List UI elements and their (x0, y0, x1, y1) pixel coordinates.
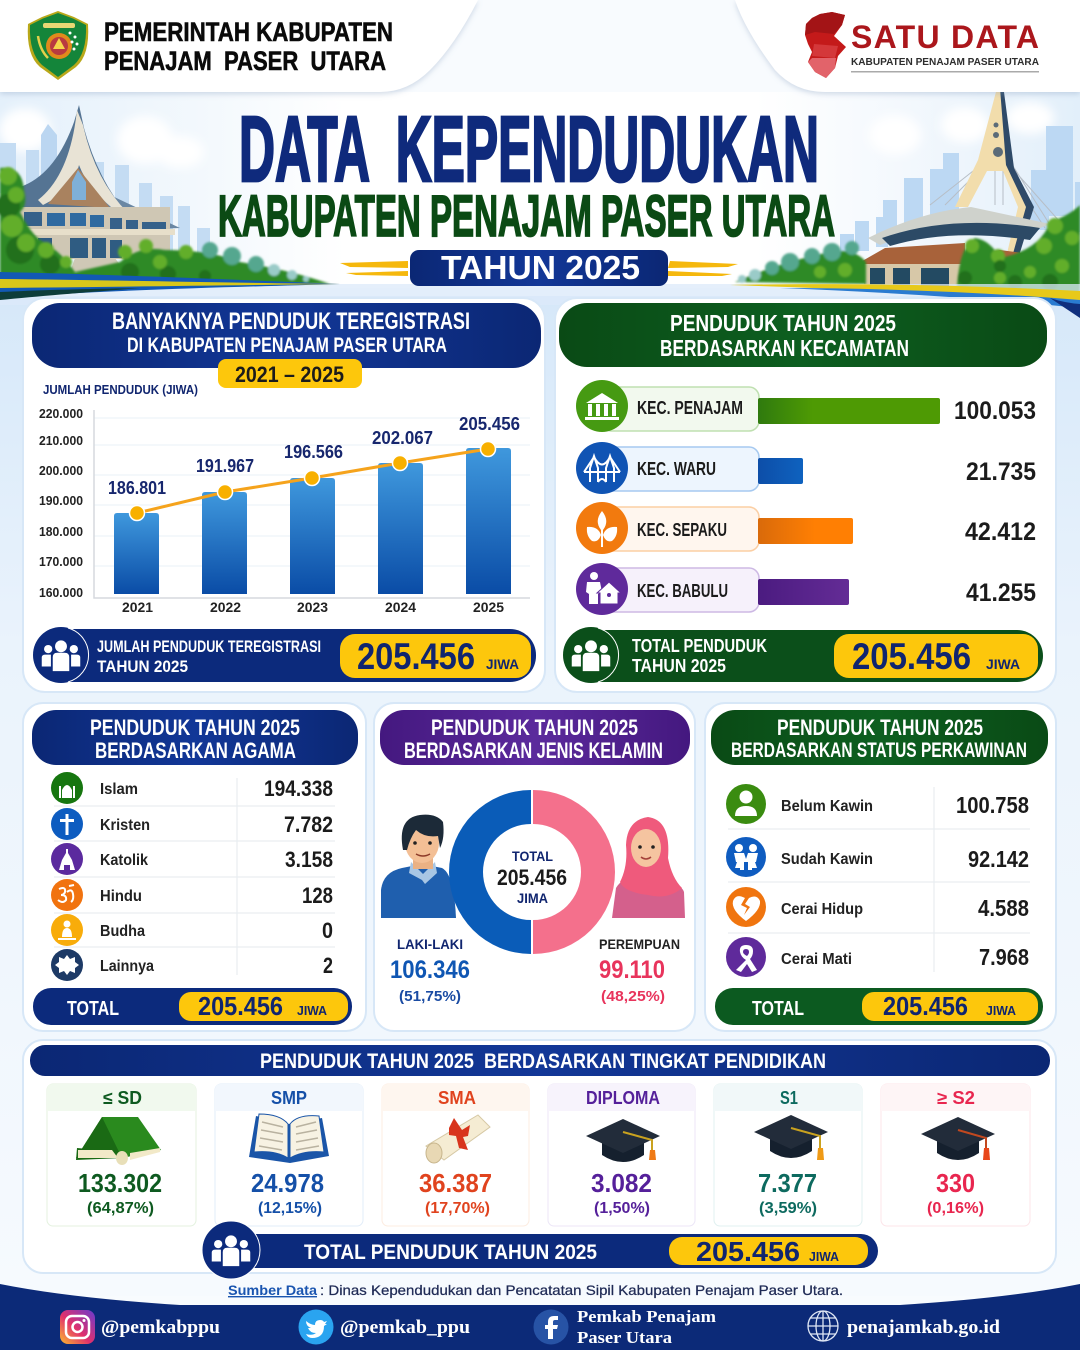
social: twitter (298, 1310, 470, 1344)
total registered bar: TAHUN 2025 (97, 657, 188, 676)
panel: registered population chart (23, 298, 545, 692)
male figure: LAKI-LAKI (397, 936, 463, 952)
panel: population by marital status (705, 703, 1056, 1031)
row: Hindu: Hindu (100, 888, 142, 905)
year badge: TAHUN 2025 (441, 249, 640, 286)
total marital bar (715, 988, 1043, 1025)
heading (559, 303, 1047, 367)
row: Waru: 21.735 (966, 458, 1036, 486)
card: S1: (3,59%) (759, 1200, 817, 1217)
footer band (0, 1284, 1080, 1350)
total registered bar (33, 627, 536, 683)
total district bar: 205.456 (852, 636, 971, 677)
panel: population by religion (23, 703, 366, 1031)
bar chart: 170.000 (39, 554, 83, 569)
heading: BERDASARKAN KECAMATAN (660, 335, 909, 361)
row: Cerai Hidup (726, 887, 1029, 927)
heading (30, 1045, 1050, 1076)
water (0, 272, 1080, 318)
social: facebook: Pemkab Penajam (577, 1307, 716, 1326)
icon: people (42, 640, 80, 671)
row: Sudah Kawin (726, 837, 1029, 877)
row: Penajam: 100.053 (954, 397, 1036, 425)
clouds (0, 102, 1054, 168)
heading: BANYAKNYA PENDUDUK TEREGISTRASI (112, 308, 470, 335)
card: SMA (382, 1084, 529, 1226)
row: Budha: 0 (322, 918, 333, 943)
total registered bar: 205.456 (357, 636, 475, 677)
bar chart: 160.000 (39, 585, 83, 600)
row: Lainnya: Lainnya (100, 958, 154, 975)
body background (0, 296, 1080, 1296)
total education bar (202, 1221, 878, 1279)
title (218, 97, 835, 249)
donut chart: TOTAL (512, 848, 553, 864)
row: Lainnya: 2 (323, 953, 333, 978)
bar chart: 196.566 (284, 442, 343, 462)
right bridge pylon and cables (868, 88, 1060, 272)
icon: people (572, 640, 610, 671)
total registered bar: JIWA (486, 656, 519, 672)
heading: PENDUDUK TAHUN 2025 (777, 715, 983, 740)
right trees (735, 205, 1080, 300)
icon: man (381, 815, 456, 918)
row: Belum Kawin: 100.758 (956, 792, 1029, 818)
social: facebook: Paser Utara (577, 1328, 673, 1347)
total religion bar (33, 988, 352, 1025)
right building (857, 243, 1030, 286)
header panel left (0, 0, 478, 92)
bar chart: 2022 (210, 599, 241, 615)
source note: : Dinas Kependudukan dan Pencatatan Sipil Kabupaten Penajam Paser Utara. (320, 1282, 843, 1298)
header panel right (735, 0, 1080, 92)
row: Belum Kawin (726, 784, 1029, 824)
header text: PENAJAM PASER UTARA (104, 46, 386, 76)
row: Belum Kawin: Belum Kawin (781, 798, 873, 815)
row: Budha (51, 914, 333, 946)
row: Babulu (576, 563, 1036, 615)
row: Sepaku (576, 502, 1036, 554)
card: SMA: (17,70%) (425, 1200, 490, 1217)
social: facebook (534, 1307, 716, 1347)
satu data wordmark: SATU DATA (851, 19, 1039, 55)
row: Sudah Kawin: 92.142 (968, 846, 1029, 872)
row: Sepaku: KEC. SEPAKU (637, 520, 727, 540)
total marital bar: TOTAL (752, 998, 804, 1020)
axis title: JUMLAH PENDUDUK (JIWA) (43, 382, 198, 397)
heading: PENDUDUK TAHUN 2025 (670, 310, 896, 336)
row: Babulu: 41.255 (966, 579, 1036, 607)
row: Kristen: Kristen (100, 817, 150, 834)
row: Budha: Budha (100, 923, 145, 940)
row: Islam: Islam (100, 781, 138, 798)
bar chart: 2023 (297, 599, 328, 615)
female figure: PEREMPUAN (599, 936, 680, 952)
card: S1: S1 (780, 1088, 798, 1108)
header text: PEMERINTAH KABUPATEN (104, 17, 393, 47)
social: twitter: @pemkab_ppu (340, 1317, 470, 1338)
total registered bar: JUMLAH PENDUDUK TEREGISTRASI (97, 637, 321, 656)
donut chart (449, 790, 615, 954)
bar chart: 190.000 (39, 493, 83, 508)
male figure (390, 936, 470, 1005)
total religion bar: JIWA (297, 1003, 328, 1018)
icon: people (212, 1235, 250, 1266)
heading: BERDASARKAN JENIS KELAMIN (404, 738, 663, 763)
row: Hindu: 128 (302, 883, 333, 908)
bar chart (39, 406, 530, 615)
icon: open book (249, 1114, 329, 1163)
left building (15, 105, 180, 272)
satu data wordmark: KABUPATEN PENAJAM PASER UTARA (851, 57, 1039, 68)
icon: regency shield logo (28, 11, 88, 80)
row: Hindu (51, 879, 333, 911)
card: SD: ≤ SD (103, 1088, 142, 1108)
year range badge: 2021 – 2025 (235, 362, 344, 387)
card: Diploma: (1,50%) (594, 1200, 650, 1217)
icon: graduation cap (754, 1115, 828, 1160)
row: Islam: 194.338 (264, 776, 333, 801)
bar chart: 200.000 (39, 463, 83, 478)
total education bar: JIWA (809, 1249, 840, 1264)
donut chart: 205.456 (497, 865, 567, 890)
row: Islam (51, 772, 333, 804)
heading: PENDUDUK TAHUN 2025 BERDASARKAN TINGKAT PENDIDIKAN (260, 1050, 826, 1073)
donut chart: JIMA (517, 890, 548, 906)
card: S1: 7.377 (758, 1168, 817, 1198)
card: SD (47, 1084, 196, 1226)
card: S2 (881, 1084, 1030, 1226)
row: Kristen (51, 808, 333, 840)
bar chart: 210.000 (39, 433, 83, 448)
panel: population by gender (374, 703, 695, 1031)
total education bar: 205.456 (696, 1236, 800, 1267)
row: Katolik: 3.158 (285, 847, 333, 872)
sky (0, 92, 1080, 288)
social: website: penajamkab.go.id (847, 1317, 1000, 1338)
social: website (808, 1311, 1000, 1341)
female figure: (48,25%) (601, 988, 665, 1005)
row: Sudah Kawin: Sudah Kawin (781, 851, 873, 868)
row: Kristen: 7.782 (284, 812, 333, 837)
card: S2: ≥ S2 (937, 1088, 975, 1108)
total marital bar: JIWA (986, 1003, 1017, 1018)
row: Sepaku: 42.412 (965, 518, 1036, 546)
card: S2: (0,16%) (927, 1200, 984, 1217)
bar chart: 2025 (473, 599, 504, 615)
row: Penajam: KEC. PENAJAM (637, 398, 743, 418)
bar chart: 180.000 (39, 524, 83, 539)
year badge (340, 249, 738, 286)
bar chart: 191.967 (196, 456, 254, 476)
icon: regency map (805, 12, 846, 78)
panel: population by district (555, 298, 1056, 692)
male figure: (51,75%) (399, 988, 461, 1005)
banner scenery (0, 88, 1080, 318)
panel: population by education (23, 1040, 1056, 1279)
heading (32, 303, 541, 368)
total district bar (563, 627, 1043, 683)
source note: Sumber Data (228, 1282, 317, 1298)
bar chart: 205.456 (459, 414, 520, 434)
card: SMP (215, 1084, 363, 1226)
female figure (599, 936, 680, 1005)
total district bar: TAHUN 2025 (632, 656, 726, 676)
bar chart: 2021 (122, 599, 153, 615)
male figure: 106.346 (390, 956, 470, 984)
row: Cerai Mati: Cerai Mati (781, 951, 852, 968)
heading: PENDUDUK TAHUN 2025 (90, 715, 300, 740)
skyline right (840, 126, 1080, 254)
row: Waru (576, 442, 1036, 494)
total district bar: JIWA (986, 656, 1020, 672)
card: SMP: 24.978 (251, 1168, 324, 1198)
row: Cerai Hidup: 4.588 (978, 895, 1029, 921)
heading (711, 710, 1048, 765)
card: SMP: SMP (271, 1088, 307, 1108)
total marital bar: 205.456 (883, 991, 968, 1021)
card: SD: 133.302 (78, 1168, 162, 1198)
row: Katolik: Katolik (100, 852, 148, 869)
row: Cerai Mati: 7.968 (979, 944, 1029, 970)
icon: graduation cap (586, 1119, 660, 1162)
row: Cerai Hidup: Cerai Hidup (781, 901, 863, 918)
header text (104, 17, 393, 76)
bar chart: 186.801 (108, 478, 166, 498)
skyline left (0, 124, 210, 258)
heading: DI KABUPATEN PENAJAM PASER UTARA (127, 334, 447, 357)
card: S2: 330 (936, 1168, 975, 1198)
heading (32, 710, 358, 765)
heading (380, 710, 690, 765)
heading: BERDASARKAN AGAMA (95, 738, 296, 763)
row: Babulu: KEC. BABULU (637, 581, 728, 601)
card: Diploma: 3.082 (591, 1168, 652, 1198)
icon: diploma scroll (426, 1115, 490, 1163)
row: Waru: KEC. WARU (637, 459, 716, 479)
card: SMA: SMA (438, 1088, 476, 1108)
total religion bar: TOTAL (67, 998, 119, 1020)
icon: graduation cap (921, 1117, 995, 1160)
total district bar: TOTAL PENDUDUK (632, 636, 767, 656)
row: Lainnya (51, 949, 333, 981)
social: instagram: @pemkabppu (101, 1317, 220, 1338)
total religion bar: 205.456 (198, 991, 283, 1021)
card: Diploma (548, 1084, 695, 1226)
row: Penajam (576, 380, 1036, 432)
bar chart: 202.067 (372, 428, 433, 448)
card: SD: (64,87%) (87, 1200, 154, 1217)
female figure: 99.110 (599, 956, 665, 984)
icon: green books (76, 1117, 161, 1165)
card: SMA: 36.387 (419, 1168, 492, 1198)
heading: PENDUDUK TAHUN 2025 (431, 715, 638, 740)
left trees (0, 167, 330, 284)
row: Katolik (51, 843, 333, 875)
total education bar: TOTAL PENDUDUK TAHUN 2025 (304, 1241, 597, 1264)
icon: woman (612, 817, 685, 918)
card: S1 (714, 1084, 862, 1226)
card: SMP: (12,15%) (258, 1200, 322, 1217)
bar chart: 2024 (385, 599, 416, 615)
card: Diploma: DIPLOMA (586, 1088, 660, 1108)
social: instagram (60, 1310, 220, 1344)
bar chart: 220.000 (39, 406, 83, 421)
satu data wordmark (851, 19, 1039, 72)
row: Cerai Mati (726, 937, 1029, 977)
